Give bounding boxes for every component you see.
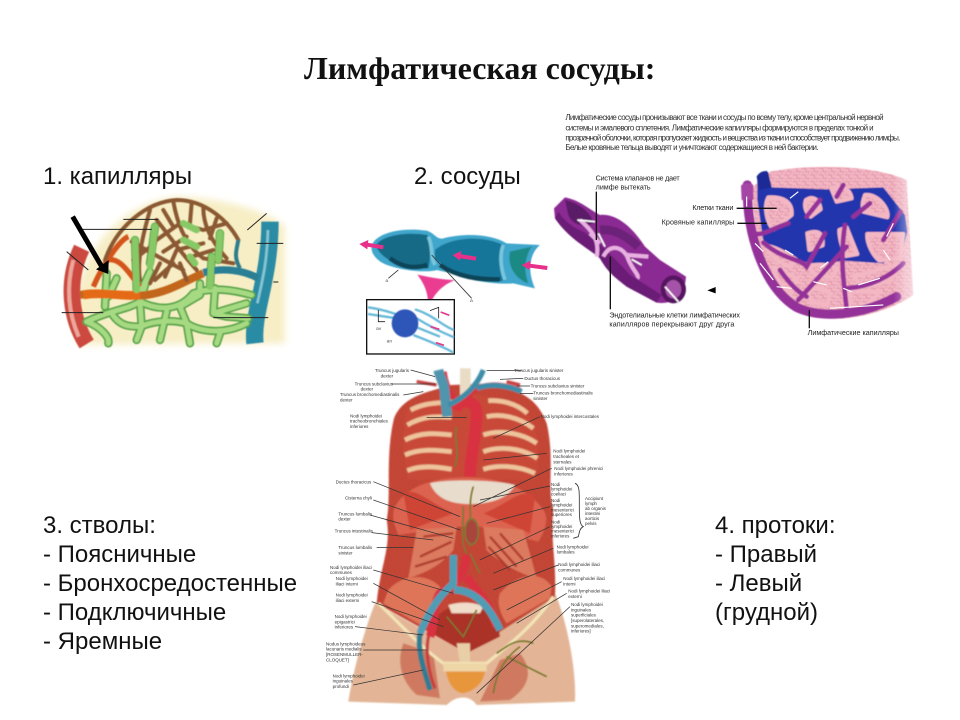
right label curly brace [573,483,583,538]
text block: ducts [715,512,836,626]
anatomical labels: Nodi lymphoidei [333,673,365,678]
right tissue [741,163,930,319]
description paragraph: Лимфатические сосуды пронизывают все ткани и сосуды по всему телу, кроме центральной нервной [565,113,884,122]
anatomical labels: inferiores] [571,629,591,634]
psoas and quadratus [408,527,537,578]
anatomical labels: inferiores [350,424,369,429]
illustration: lymphatic capillaries cross-section [554,113,930,337]
micro labels: av [376,326,382,332]
leader lines [353,370,570,693]
vena cava [438,370,447,417]
title: Лимфатическая сосуды: [304,50,655,86]
diaphragm [393,477,546,542]
anatomical labels: sinister [338,550,353,555]
left tube [554,197,686,303]
spine [460,368,471,398]
anatomical labels [326,368,610,689]
text block: trunks: 3. стволы: [43,512,156,539]
anatomical labels: Nodi lymphoidei phrenici [554,466,603,471]
description paragraph [565,113,900,152]
micro labels: an [387,339,392,345]
tissue cells [766,187,903,310]
anatomical labels: pelvis [585,521,597,526]
anatomical labels: Truncus jugularis sinister [514,368,564,373]
anatomical labels: inferiores [335,625,354,630]
purple lymphatic walls [747,185,903,314]
anatomical labels: [superolaterales, [571,618,604,623]
white flow marks [747,192,893,308]
anatomical labels: Truncus bronchomediastinalis [340,392,400,397]
anatomical labels: lumbales [557,550,575,555]
diagram labels: Клетки ткани [692,204,733,212]
leaders [596,192,809,328]
skin lower body [348,593,575,705]
anatomical labels: Nodi lymphoidei [335,614,367,619]
anatomical labels: coeliaci [551,491,566,496]
anatomical labels: Nodi lymphoidei iliaci [330,565,372,570]
anatomical labels: Truncus subclavius sinister [531,383,585,388]
illustration: abdominal lymphatic anatomy [326,368,610,705]
leader lines [62,213,283,318]
anatomical labels: superficiales [571,613,597,618]
green lymph network [87,227,252,343]
anatomical labels: epigastrici [335,619,355,624]
anatomical labels: CLOQUET] [326,657,349,662]
anatomical labels: Nodi [551,482,560,487]
description paragraph: Белые кровяные тельца выводят и уничтожают содержащиеся в ней бактерии. [565,143,819,152]
fade to white [893,163,930,313]
anatomical labels: Nodi lymphoidei [557,544,589,549]
anatomical labels: Truncus lumbalis [338,545,373,550]
anatomical labels: profundi [333,684,349,689]
text block: ducts: - Правый [715,541,817,568]
anatomical labels: lacunaris medialis [326,647,362,652]
anatomical labels: Nodi [551,519,560,524]
micro labels [376,278,473,345]
text block: ducts: - Левый [715,570,802,597]
anatomical labels: tracheales et [553,454,580,459]
anatomical labels: Nodi lymphoidei iliaci [563,576,605,581]
anatomical labels: Nodi lymphoidei [336,593,368,598]
anatomical labels: lymphoidei [551,503,572,508]
anatomical labels: inferiores [554,471,574,476]
anatomical labels: iliaci externi [336,598,359,603]
anatomical labels: aorticis [585,516,600,521]
anatomical labels: sternales [553,459,572,464]
abdominal great vessels [430,555,497,637]
anatomical labels: dexter [338,517,351,522]
text block: trunks [43,512,297,655]
anatomical labels: superiores [551,512,573,517]
anatomical labels: lymphoidei [551,524,572,529]
flow arrows [365,244,547,268]
label: capillaries: 1. капилляры [43,163,192,190]
text block: trunks: - Бронхосредостенные [43,570,297,597]
anatomical labels: communes [558,567,581,572]
lymph chain [447,427,547,693]
illustration: blood and lymph capillary bed [62,197,285,345]
vessel body [372,230,540,288]
anatomical labels: lymphoidei [551,487,572,492]
text block: ducts: 4. протоки: [715,512,836,539]
anatomical labels: Nodi lymphoidei iliaci [558,562,600,567]
description paragraph: прозрачной оболочки, которая пропускает жидкость и вещества из ткани и способствует продвижению лимфы. [565,133,900,142]
pelvic cavity [433,604,500,653]
anatomical labels: tracheobronchiales [350,419,389,424]
anatomical labels: [ROSENMULLER- [326,652,363,657]
inset [367,300,454,354]
anatomical labels: lymph [585,501,597,506]
anatomical labels: dexter [361,387,374,392]
anatomical labels: dexter [381,373,394,378]
anatomical labels: externi [568,594,582,599]
anatomical labels: Cisterna chyli [345,496,372,501]
capillary web [105,200,238,283]
chest cavity [403,395,539,479]
anatomical labels: iliaci interni [336,581,358,586]
anatomical labels: sinister [533,396,548,401]
text block: trunks: - Поясничные [43,541,196,568]
anatomical labels: dexter [340,397,353,402]
anatomical labels: interni [563,581,576,586]
tissue background [72,197,285,345]
anatomical labels: Nodi [551,498,560,503]
arrow: pointer [73,217,103,269]
anatomical labels: Truncus jugularis [375,368,410,373]
description paragraph: системы и эмалевого сплетения. Лимфатические капилляры формируются в пределах тонкой и [565,123,874,132]
blue capillaries [757,171,907,264]
pubic region [446,672,485,693]
text block: ducts: (грудной) [715,599,818,626]
anatomical labels: Truncus lumbalis [338,511,373,516]
ribs [405,401,537,473]
anatomical labels: Truncus subclavius [355,381,394,386]
anatomical labels: Nodi lymphoidei iliaci [568,589,610,594]
micro labels: a [470,298,473,304]
anatomical labels: Ductus thoracicus [524,376,561,381]
anatomical labels: inguinales [571,607,592,612]
anatomical labels: Nodus lymphoideus [326,641,366,646]
inguinal ligaments [378,597,553,663]
anatomical labels: Ductus thoracicus [336,479,372,484]
diagram labels: Лимфатические капилляры [808,329,899,337]
anatomical labels: Nodi lymphoidei [350,413,382,418]
text block: trunks: - Яремные [43,628,162,655]
arteriole to venule [80,273,203,296]
iliac muscle [383,576,552,627]
illustration: lymph vessel with valves [359,230,547,354]
anatomical labels: mesenterici [551,529,574,534]
anatomical labels: inferiores [551,533,570,538]
artery [72,248,87,344]
aorta [455,402,477,477]
anatomical labels: mesenterici [551,507,574,512]
diagram labels: лимфе вытекать [596,183,651,191]
diagram labels: Эндотелиальные клетки лимфатических [609,311,740,319]
diagram labels: Кровяные капилляры [662,219,734,227]
label: vessels: 2. сосуды [414,163,521,190]
groin muscle and vessels [419,633,430,690]
anatomical labels: Truncus bronchomediastinalis [533,391,593,396]
text block: trunks: - Подключичные [43,599,226,626]
micro labels: a [385,278,388,284]
anatomical labels: inguinales [333,679,354,684]
diagram labels [596,175,899,337]
anatomical labels: superomediales, [571,623,604,628]
chest and abdominal wall [377,383,555,653]
anatomical labels: communes [330,570,353,575]
anatomical labels: intestini [585,511,600,516]
anatomical labels: Truncus intestinalis [335,528,374,533]
anatomical labels: Nodi lymphoidei [571,602,603,607]
vein [255,222,270,343]
pink zoom wedge [417,275,455,307]
anatomical labels: Accipiunt [585,496,604,501]
diagram labels: Система клапанов не дает [596,175,680,183]
anatomical labels: ab organis [585,506,607,511]
anatomical labels: Nodi lymphoidei [336,576,368,581]
diagram labels: капилляров перекрывают друг друга [609,321,734,329]
anatomical labels: Nodi lymphoidei intercostales [541,414,600,419]
anatomical labels: Nodi lymphoidei [553,449,585,454]
